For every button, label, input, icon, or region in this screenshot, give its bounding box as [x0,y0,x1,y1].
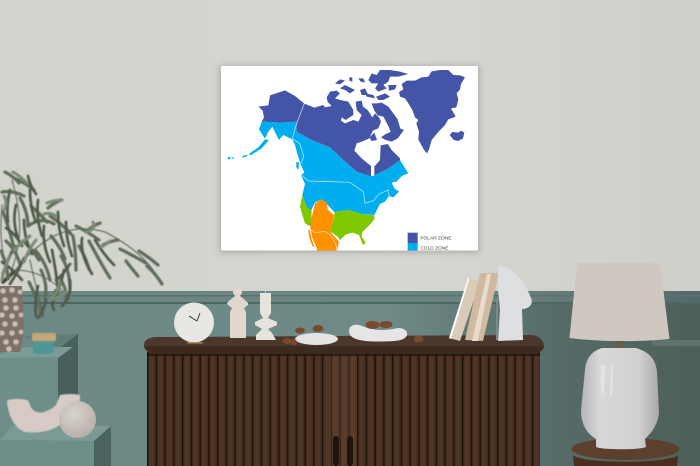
polar zone mainland [258,90,381,176]
legend [408,233,452,251]
sideboard fluted body [147,352,540,466]
sideboard shadow under top [147,352,540,356]
alaska peninsula and aleutian islands [228,139,299,170]
leaning books [449,273,499,341]
ceramic ball [59,401,96,438]
door pulls [333,436,353,466]
turned candle holder [227,288,248,338]
legend label: cold zone: COLD ZONE [420,245,449,251]
legend swatch: polar zone [408,233,418,243]
table lamp [570,263,670,449]
lamp shade [570,263,670,341]
right stone dish [349,325,407,342]
wall background [0,0,700,292]
wooden sideboard [144,335,544,466]
sideboard top [144,335,544,354]
lamp ceramic base [581,348,659,449]
wainscot panel [0,303,700,466]
baja california gap [308,228,317,251]
left stone dish [295,333,338,345]
left stacked plinths [0,334,111,466]
cold zone [259,122,408,215]
sideboard centre door highlight [329,354,357,466]
candle wick [265,288,266,293]
eucalyptus branches [1,172,162,318]
legend label: polar zone: POLAR ZONE [420,236,452,242]
lamp stem [615,341,624,349]
bookend edge shadow [496,298,498,340]
table clock [174,302,214,344]
glass jar with cork lid [32,333,56,354]
desert zone [310,199,339,251]
temperate zone [300,195,374,245]
pillar candle on holder [255,293,277,340]
almonds [282,321,424,345]
arctic islands [335,70,408,141]
lamp glaze highlight [601,365,613,396]
sculptural head bookend [498,266,532,341]
lower panel moulding at right [652,340,700,346]
legend swatch: cold zone [408,243,418,251]
country borders [292,104,389,251]
ceramic arch vase [7,394,80,432]
side table [572,438,680,466]
beaded plant pot [0,286,24,352]
chair rail moulding [0,291,700,304]
iceland [450,131,464,141]
quebec and labrador [374,144,400,175]
greenland [399,70,465,153]
framed canvas: north america climate map [219,65,480,253]
baffin island [372,103,404,142]
